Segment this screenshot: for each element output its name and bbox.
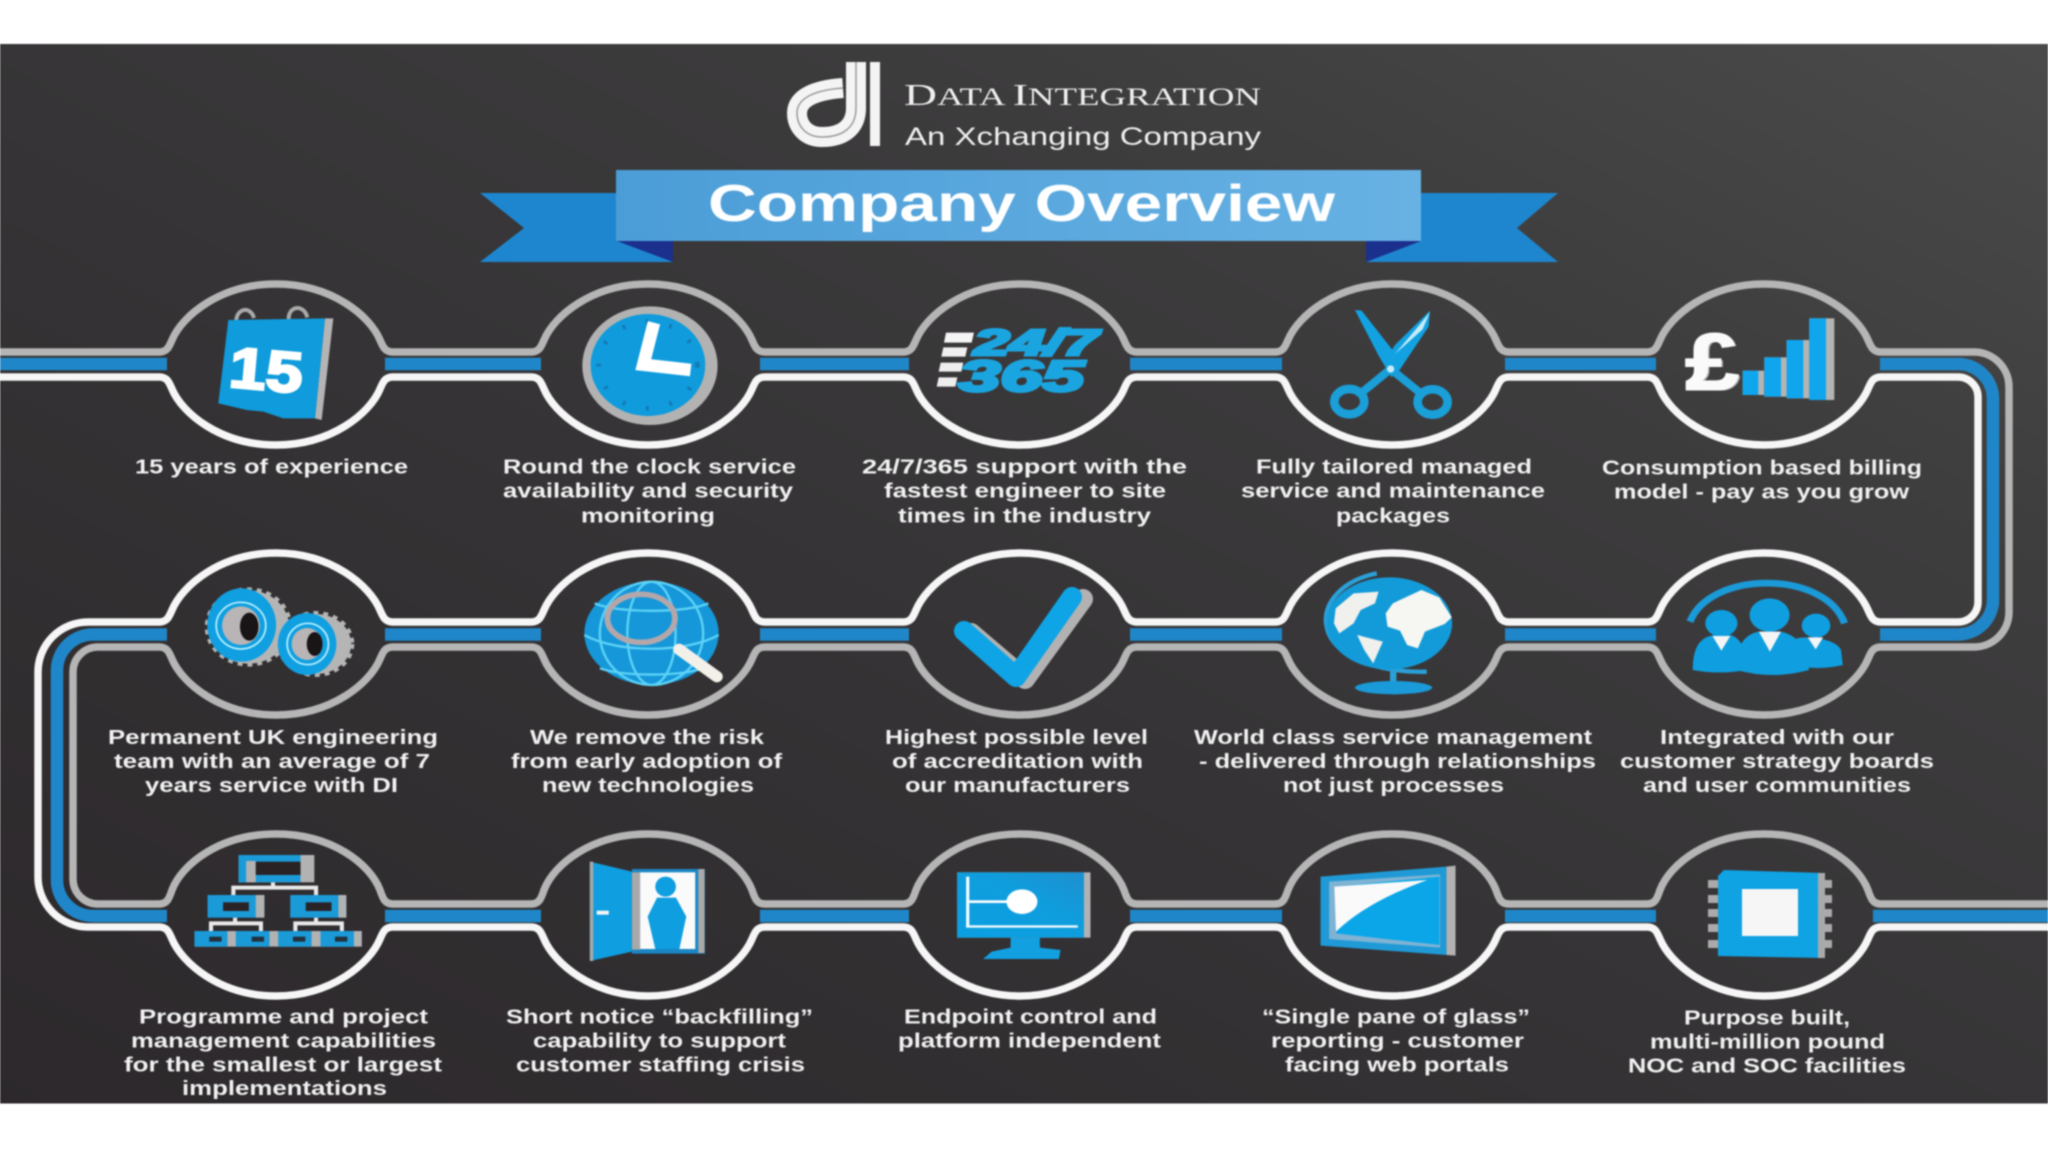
icon: org chart: [194, 855, 362, 947]
item 12: door: [506, 862, 813, 1076]
caption: from early adoption of: [511, 750, 782, 773]
item 9: world globe: [1194, 573, 1596, 797]
left fold: [617, 241, 673, 262]
icon: check mark: [964, 597, 1083, 679]
caption: model - pay as you grow: [1614, 480, 1909, 504]
caption: new technologies: [542, 774, 754, 797]
caption: [1241, 456, 1545, 528]
caption: platform independent: [898, 1030, 1161, 1052]
caption: Round the clock service: [503, 456, 796, 478]
icon: monitor: [957, 872, 1091, 959]
caption: Programme and project: [139, 1006, 428, 1028]
caption: [506, 1006, 813, 1076]
caption: Short notice “backfilling”: [506, 1006, 813, 1028]
caption: service and maintenance: [1241, 480, 1545, 502]
path: white line: [0, 377, 2048, 996]
item 10: people: [1620, 583, 1934, 797]
item 6: gears: [108, 588, 438, 797]
icon: pound and bars: £: [1685, 317, 1739, 406]
icon: door with person: [590, 862, 705, 961]
caption: and user communities: [1643, 774, 1911, 797]
icon: calendar: 15: [227, 336, 306, 406]
right ribbon tail: [1366, 193, 1558, 262]
caption: facing web portals: [1285, 1054, 1509, 1076]
caption: Permanent UK engineering: [108, 726, 438, 749]
caption: Consumption based billing: [1602, 456, 1922, 480]
item 1: 15 years: [135, 308, 408, 478]
icon: pane of glass: [1321, 866, 1456, 956]
caption: capability to support: [533, 1030, 786, 1052]
item 7: globe and magnifier: [511, 582, 782, 797]
caption: times in the industry: [898, 504, 1152, 528]
caption: World class service management: [1194, 726, 1592, 749]
caption: Integrated with our: [1660, 726, 1894, 749]
caption: [124, 1006, 442, 1100]
caption: 24/7/365 support with the: [862, 456, 1187, 478]
caption: customer strategy boards: [1620, 750, 1934, 773]
caption: [503, 456, 796, 528]
item 15: chip: [1628, 870, 1906, 1078]
icon: 24/7/365: 24/7: [972, 322, 1101, 363]
caption: [108, 726, 438, 797]
caption: “Single pane of glass”: [1262, 1006, 1530, 1028]
caption: monitoring: [581, 504, 715, 528]
item 5: pound and bars: [1602, 317, 1922, 504]
caption: [898, 1006, 1161, 1052]
caption: Endpoint control and: [904, 1006, 1157, 1028]
icon: world globe: [1326, 573, 1452, 694]
caption: availability and security: [503, 480, 794, 502]
item 14: pane of glass: [1262, 866, 1530, 1076]
item 11: org chart: [124, 855, 442, 1100]
caption: team with an average of 7: [114, 750, 430, 773]
logo text: An Xchanging Company: An Xchanging Company: [905, 123, 1262, 151]
caption: packages: [1336, 504, 1450, 528]
caption: of accreditation with: [892, 750, 1143, 773]
caption: [885, 726, 1148, 797]
caption: implementations: [182, 1077, 387, 1100]
caption: We remove the risk: [530, 726, 765, 749]
caption: [1602, 456, 1922, 504]
caption: customer staffing crisis: [516, 1054, 805, 1076]
caption: Fully tailored managed: [1256, 456, 1532, 478]
path: grey line: [0, 284, 2048, 904]
right fold: [1366, 241, 1421, 262]
caption: years service with DI: [145, 774, 398, 797]
caption: Highest possible level: [885, 726, 1148, 749]
logo text: Data Integration: D ATA INTEGRATION: [904, 77, 1261, 112]
caption: fastest engineer to site: [884, 480, 1166, 502]
icon: wireframe globe with magnifier: [584, 582, 719, 685]
caption: our manufacturers: [905, 774, 1130, 797]
logo mark: [797, 62, 880, 146]
caption: [862, 456, 1187, 528]
banner band: [616, 170, 1421, 241]
caption: for the smallest or largest: [124, 1054, 442, 1076]
caption: reporting - customer: [1271, 1030, 1524, 1052]
title banner: [480, 170, 1558, 262]
caption: - delivered through relationships: [1199, 750, 1596, 773]
caption: [511, 726, 782, 797]
caption: Purpose built,: [1684, 1006, 1850, 1030]
item 3: 24/7/365: [862, 322, 1187, 528]
logo: [797, 62, 1262, 151]
caption: [1194, 726, 1596, 797]
item 2: clock: [503, 306, 796, 528]
icon: gears: [207, 588, 351, 675]
icon: pound and bars: [1685, 317, 1834, 408]
path: blue line segments: [0, 364, 2048, 916]
left ribbon tail: [480, 193, 673, 262]
icon: calendar: [218, 308, 333, 420]
icon: scissors: [1334, 310, 1448, 415]
icon: people under arc: [1690, 583, 1845, 675]
caption: multi-million pound: [1650, 1030, 1885, 1054]
caption: [1620, 726, 1934, 797]
title: Company Overview: [708, 175, 1336, 233]
caption: 15 years of experience: [135, 456, 408, 478]
item 13: monitor: [898, 872, 1161, 1052]
caption: [1628, 1006, 1906, 1078]
caption: [1262, 1006, 1530, 1076]
item 8: check mark: [885, 597, 1148, 797]
icon: pound and bars: £: [1688, 319, 1741, 408]
caption: management capabilities: [131, 1030, 436, 1052]
icon: chip: [1708, 870, 1832, 958]
icon: 24/7/365: [937, 322, 1101, 401]
icon: clock: [582, 306, 718, 425]
icon: 24/7/365: 365: [959, 353, 1086, 401]
item 4: scissors: [1241, 310, 1545, 528]
caption: not just processes: [1283, 774, 1504, 797]
caption: NOC and SOC facilities: [1628, 1054, 1906, 1078]
